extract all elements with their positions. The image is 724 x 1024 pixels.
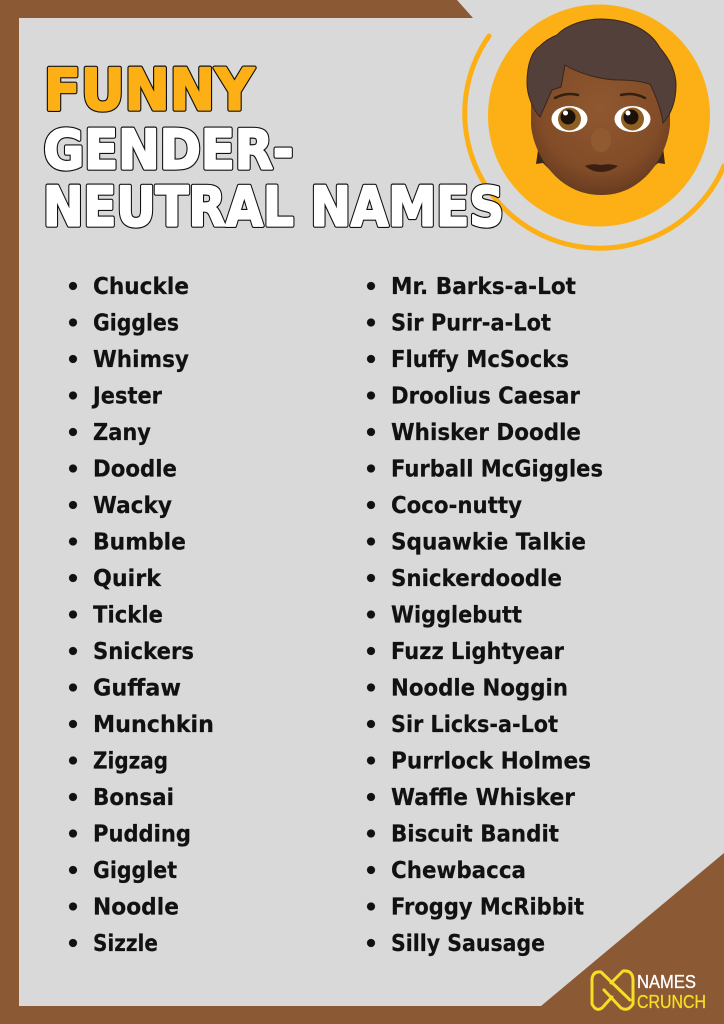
title line: NEUTRAL NAMES: NEUTRAL NAMES (43, 176, 504, 239)
right name list: Squawkie Talkie (391, 530, 586, 556)
yellow circle (488, 4, 710, 226)
brown frame: top and left (0, 0, 473, 1024)
left name list: Giggles (93, 310, 179, 336)
right name list: Noodle Noggin (391, 676, 568, 702)
right name list: Snickerdoodle (391, 566, 562, 592)
left name list: Jester (91, 384, 163, 410)
left name list: Guffaw (93, 676, 181, 702)
left name list: Munchkin (93, 712, 214, 738)
title line: FUNNY: FUNNY (44, 58, 255, 124)
logo text: NAMES: NAMES (637, 972, 696, 992)
right name list: Coco-nutty (391, 493, 522, 519)
left name list: Bumble (93, 530, 186, 556)
right name list: Sir Licks-a-Lot (391, 712, 558, 738)
right name list: Fluffy McSocks (391, 347, 569, 373)
title (43, 58, 504, 239)
logo text: CRUNCH: CRUNCH (637, 992, 706, 1012)
left name list: Snickers (93, 639, 194, 665)
right name list (367, 274, 603, 957)
left name list: Quirk (93, 566, 162, 592)
title line: GENDER-: GENDER- (44, 118, 294, 182)
right name list: Purrlock Holmes (391, 748, 591, 774)
right name list: Furball McGiggles (391, 456, 603, 482)
left name list: Gigglet (93, 858, 177, 884)
logo: Names Crunch (592, 971, 706, 1012)
icon: person emoji face (527, 19, 676, 195)
left name list: Bonsai (93, 785, 174, 811)
left name list: Zigzag (93, 748, 168, 774)
left name list: Pudding (93, 822, 191, 848)
right name list: Whisker Doodle (391, 420, 581, 446)
right name list: Waffle Whisker (391, 785, 576, 811)
right name list: Sir Purr-a-Lot (391, 310, 551, 336)
left name list: Noodle (93, 894, 179, 920)
icon: N logo mark (592, 971, 633, 1009)
brown frame: bottom right corner (0, 853, 724, 1024)
title line: FUNNY: FUNNY (44, 58, 255, 124)
left name list (69, 274, 214, 957)
left name list: Doodle (93, 456, 177, 482)
left name list: Whimsy (93, 347, 189, 373)
left name list: Tickle (93, 602, 163, 628)
title line: GENDER-: GENDER- (44, 118, 294, 182)
left name list: Wacky (93, 493, 172, 519)
right name list: Silly Sausage (391, 931, 545, 957)
right name list: Biscuit Bandit (391, 822, 559, 848)
right name list: Droolius Caesar (391, 384, 581, 410)
right name list: Froggy McRibbit (391, 894, 584, 920)
left name list: Sizzle (93, 931, 158, 957)
title line: NEUTRAL NAMES: NEUTRAL NAMES (43, 176, 504, 239)
left name list: Zany (93, 420, 151, 446)
right name list: Fuzz Lightyear (391, 639, 565, 665)
left name list: Chuckle (93, 274, 189, 300)
right name list: Mr. Barks-a-Lot (391, 274, 576, 300)
decorative ring (465, 36, 724, 248)
right name list: Chewbacca (391, 858, 526, 884)
right name list: Wigglebutt (391, 602, 522, 628)
